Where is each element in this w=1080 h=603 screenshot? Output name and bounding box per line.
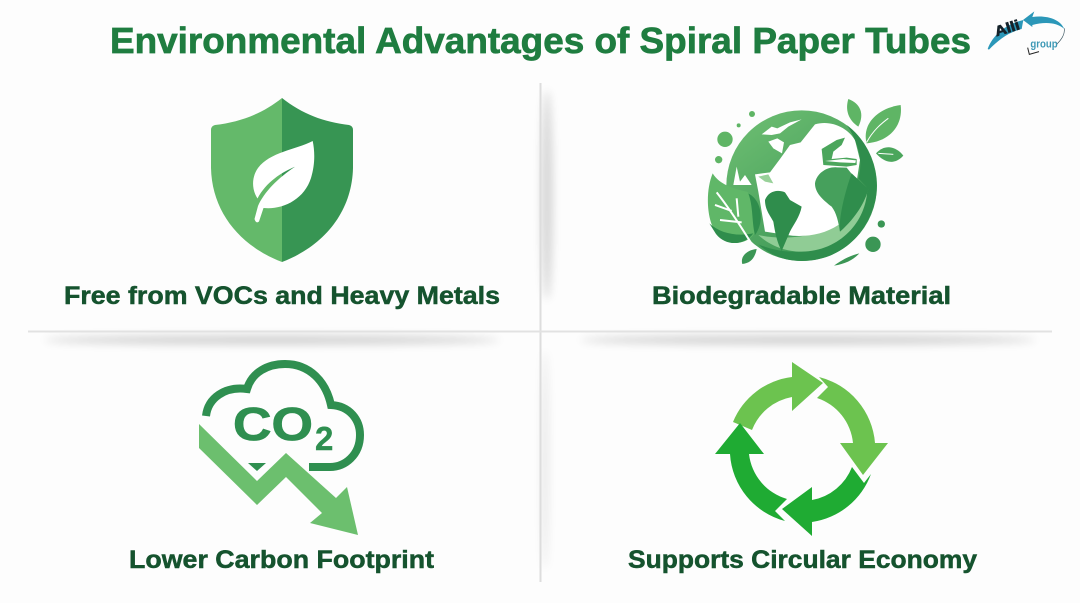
panel: lower carbon footprint <box>129 364 435 574</box>
label: supports circular economy: Supports Circular Economy <box>628 546 977 574</box>
title: Environmental Advantages of Spiral Paper Tubes <box>110 20 971 61</box>
label: lower carbon footprint: Lower Carbon Footprint <box>129 546 435 574</box>
icon: CO2 cloud with downward arrow: 2 <box>315 420 333 457</box>
icon: CO2 cloud with downward arrow <box>199 364 360 535</box>
logo wordmark: Alli <box>993 16 1021 39</box>
icon: circular recycling arrows <box>715 362 888 536</box>
logo <box>988 11 1064 54</box>
label: free from VOCs: Free from VOCs and Heavy Metals <box>64 282 500 310</box>
label: biodegradable material: Biodegradable Material <box>652 282 951 310</box>
logo: group <box>1030 39 1058 51</box>
panel: biodegradable material <box>652 99 951 310</box>
panel: supports circular economy <box>628 362 977 574</box>
icon: earth with leaves <box>708 99 903 266</box>
icon: shield with leaf <box>211 98 353 262</box>
icon: CO2 cloud with downward arrow: CO <box>233 398 313 450</box>
panel: free from VOCs and heavy metals <box>64 98 500 310</box>
